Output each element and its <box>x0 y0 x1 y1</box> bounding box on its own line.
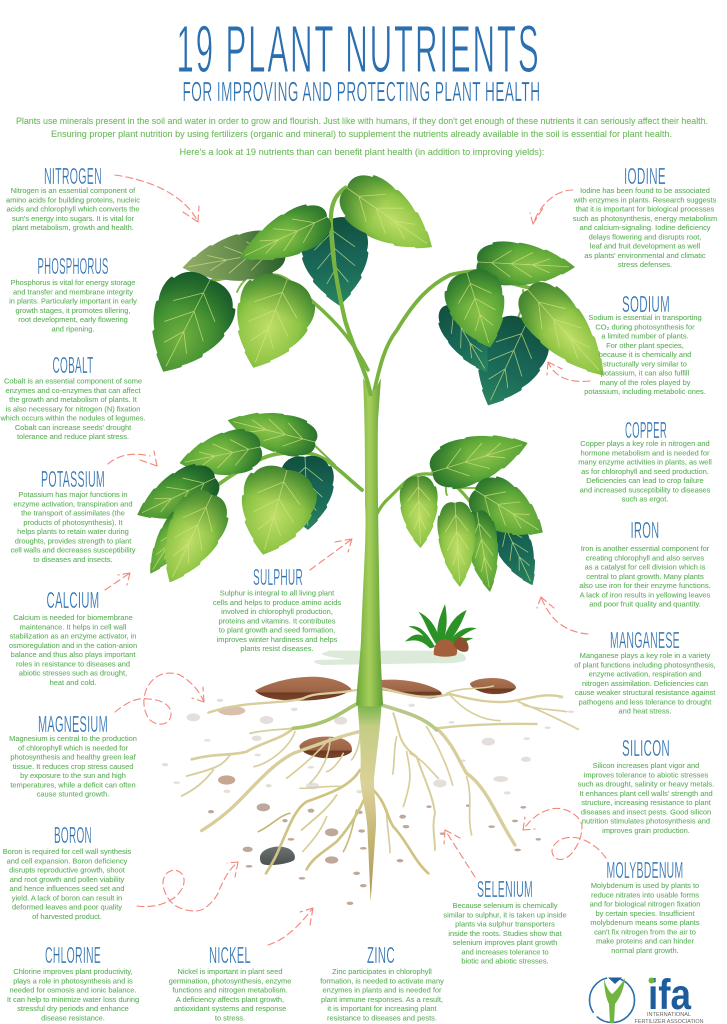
nitrogen <box>6 163 140 232</box>
boron: deformed leaves and poor quality <box>12 902 122 912</box>
chlorine: plays a role in photosynthesis and is <box>13 976 133 985</box>
boron: yield. A lack of boron can result in <box>12 893 122 902</box>
boron: and cell expansion. Boron deficiency <box>7 856 128 865</box>
molybdenum: and for biological nitrogen fixation <box>590 900 700 908</box>
selenium: inside the roots. Studies show that <box>448 929 563 938</box>
iodine: IODINE <box>624 163 666 189</box>
iodine: delays flowering and disrupts root, <box>589 232 701 241</box>
silicon: Silicon increases plant vigor and <box>593 761 699 770</box>
iron: as a catalyst for cell division which is <box>585 562 706 572</box>
calcium: Calcium is needed for biomembrane <box>13 613 133 622</box>
magnesium: by exposure to the sun and high <box>20 771 126 780</box>
calcium: osmoregulation and in the cation-anion <box>9 641 137 650</box>
phosphorus: in plants. Particularly important in early <box>9 296 137 306</box>
iodine: and calcium-signaling. Iodine deficiency <box>579 223 711 232</box>
nickel: antioxidant systems and response <box>174 1004 286 1013</box>
silicon: SILICON <box>622 735 670 761</box>
nickel: germination, photosynthesis, enzyme <box>169 976 291 985</box>
nitrogen: plant metabolism, growth and health. <box>12 223 134 232</box>
magnesium <box>9 711 137 798</box>
copper: many enzyme activities in plants, as well <box>578 458 712 466</box>
silicon: nutrition stimulates photosynthesis and <box>582 816 710 826</box>
phosphorus <box>9 253 137 333</box>
iodine: that it is important for biological processes <box>576 204 715 214</box>
potassium: to diseases and insects. <box>33 555 113 564</box>
sodium: Sodium is essential in transporting <box>588 313 702 322</box>
arrow: nickel <box>268 908 313 945</box>
intro text: Here's a look at 19 nutrients than can benefit plant health (in addition to improving yields): <box>180 147 544 157</box>
roots <box>182 686 578 873</box>
chlorine: Chlorine improves plant productivity, <box>13 967 133 976</box>
zinc: plant immune responses. As a result, <box>321 995 443 1004</box>
sulphur: involved in chlorophyll production, <box>221 607 333 616</box>
nickel: functions and nitrogen metabolism. <box>172 986 288 994</box>
calcium: abiotic stresses such as drought, <box>19 668 127 678</box>
silicon <box>578 735 714 835</box>
nitrogen: NITROGEN <box>44 163 102 189</box>
cobalt: Cobalt can increase seeds' drought <box>15 423 132 432</box>
manganese: and heat stress. <box>619 706 671 716</box>
silicon: diseases and insect pests. Good silicon <box>581 807 711 816</box>
molybdenum <box>590 857 700 955</box>
cobalt <box>0 352 146 441</box>
zinc: resistance to diseases and pests. <box>327 1013 437 1022</box>
boron: disrupts reproductive growth, shoot <box>9 866 126 874</box>
cobalt: COBALT <box>52 352 94 378</box>
leaves: upper plant <box>129 164 623 393</box>
stems <box>208 270 530 523</box>
potassium <box>11 466 136 564</box>
rocks <box>162 677 578 905</box>
iodine: stress defenses. <box>618 260 672 269</box>
arrow: iodine <box>530 190 573 224</box>
sodium: For other plant species, <box>606 341 684 350</box>
arrow: sodium <box>547 362 590 381</box>
magnesium: of chlorophyll which is needed for <box>18 743 129 752</box>
iodine: leaf and fruit development as well <box>590 242 701 250</box>
sodium: potassium, including metabolic ones. <box>584 387 706 396</box>
manganese <box>574 627 716 716</box>
intro text: Plants use minerals present in the soil and water in order to grow and flourish. Just like with humans, if they don't get enough of these nutrients it can seriously affect their health. <box>16 116 708 126</box>
iodine: as plants' environmental and climatic <box>584 251 706 260</box>
manganese: cause weaker structural resistance against <box>575 688 716 697</box>
iron: and poor fruit quality and quantity. <box>589 600 701 608</box>
chlorine <box>7 942 139 1022</box>
silicon: such as drought, salinity or heavy metals. <box>578 780 714 788</box>
magnesium: cause stunted growth. <box>37 790 109 798</box>
stone <box>260 847 295 865</box>
arrow: potassium <box>108 451 157 466</box>
logo ring <box>590 978 634 1022</box>
logo Y figure <box>604 978 625 1023</box>
boron: and root growth and pollen viability <box>10 875 125 884</box>
chlorine: needed for osmosis and ionic balance. <box>10 986 136 994</box>
intro text: Ensuring proper plant nutrition by using fertilizers (organic and mineral) to supplement the nutrients already available in the soil is essential for plant health. <box>51 129 672 139</box>
potassium: helps plants to retain water during <box>17 527 129 536</box>
boron: BORON <box>54 822 92 848</box>
boron: Boron is required for cell wall synthesis <box>3 847 132 856</box>
nickel: to stress. <box>215 1013 245 1022</box>
potassium: products of photosynthesis). It <box>23 518 124 527</box>
phosphorus: root development, early flowering <box>18 315 128 324</box>
zinc <box>320 942 444 1022</box>
boron: of harvested product. <box>32 912 102 921</box>
calcium: roles in resistance to diseases and <box>16 659 130 668</box>
selenium: biotic and abiotic stresses. <box>461 956 549 966</box>
leaves: lower plant <box>127 401 556 595</box>
arrow: calcium <box>105 573 130 590</box>
nickel <box>169 942 291 1022</box>
phosphorus: PHOSPHORUS <box>38 253 108 279</box>
sodium: structurally very similar to <box>603 359 687 368</box>
magnesium: MAGNESIUM <box>38 711 108 737</box>
zinc: Zinc participates in chlorophyll <box>332 967 432 976</box>
calcium: balance and thus also plays important <box>11 650 136 659</box>
sodium: CO₂ during photosynthesis for <box>595 322 695 331</box>
nickel: Nickel is important in plant seed <box>177 967 283 976</box>
sulphur <box>213 564 341 653</box>
calcium: heat and cold. <box>50 678 96 687</box>
phosphorus: and transfer and membrane integrity <box>13 287 133 296</box>
zinc: ZINC <box>367 942 395 968</box>
silicon: It enhances plant cell walls' strength and <box>579 789 713 798</box>
iodine <box>573 163 717 269</box>
iron: Iron is another essential component for <box>581 544 710 553</box>
chlorine: CHLORINE <box>45 942 101 968</box>
sulphur: proteins and vitamins. It contributes <box>218 616 336 625</box>
manganese: Manganese plays a key role in a variety <box>580 651 711 660</box>
nitrogen: acids and chlorophyll which converts the <box>6 204 140 214</box>
iron: also use iron for their enzyme functions. <box>579 581 711 590</box>
copper: such as ergot. <box>622 494 668 504</box>
magnesium: tissue. It reduces crop stress caused <box>13 762 133 771</box>
molybdenum: make proteins and can hinder <box>596 936 695 946</box>
cobalt: which occurs within the nodules of legumes. <box>0 414 146 422</box>
copper: and increased susceptibility to diseases <box>580 485 711 494</box>
calcium: stabilization as an enzyme activator, in <box>10 632 136 640</box>
main trunk <box>356 378 383 706</box>
zinc: enzymes in plants and is needed for <box>322 986 442 994</box>
manganese: of plant functions including photosynthesis, <box>574 660 716 669</box>
logo wordmark: ifa <box>648 971 692 1019</box>
iron: IRON <box>630 517 660 543</box>
IFA logo <box>590 971 704 1024</box>
silicon: improves grain production. <box>602 826 690 835</box>
calcium: maintenance. It helps in cell wall <box>20 622 127 631</box>
nitrogen: sun's energy into sugars. It is vital for <box>12 214 135 223</box>
cobalt: Cobalt is an essential component of some <box>4 376 142 386</box>
intro text <box>16 116 708 157</box>
boron: and hence influences seed set and <box>10 884 124 893</box>
sulphur: to plant growth and seed formation, <box>219 626 335 634</box>
selenium: and increases tolerance to <box>461 947 549 956</box>
magnesium: photosynthesis and healthy green leaf <box>10 752 137 762</box>
silicon: structure, increasing resistance to plant <box>581 798 712 807</box>
nickel: NICKEL <box>209 942 251 968</box>
iodine: Iodine has been found to be associated <box>580 186 710 195</box>
magnesium: Magnesium is central to the production <box>9 734 137 743</box>
molybdenum: normal plant growth. <box>611 946 679 955</box>
magnesium: temperatures, while a deficit can often <box>10 780 136 789</box>
manganese: pathogens and less tolerance to drought <box>579 697 712 706</box>
sodium: because it is chemically and <box>599 350 691 359</box>
calcium: CALCIUM <box>46 587 100 613</box>
pebbles <box>162 696 574 795</box>
nickel: A deficiency affects plant growth, <box>176 995 284 1004</box>
potassium: Potassium has major functions in <box>18 490 128 499</box>
sodium: many of the roles played by <box>600 378 691 387</box>
copper: COPPER <box>625 417 667 443</box>
copper: hormone metabolism and is needed for <box>580 448 710 457</box>
molybdenum: molybdenum means some plants <box>590 918 700 927</box>
calcium <box>9 587 137 687</box>
potassium: droughts, provides strength to plant <box>15 536 132 545</box>
zinc: it is important for increasing plant <box>327 1004 437 1013</box>
cobalt: enzymes and co-enzymes that can affect <box>5 386 141 395</box>
boron <box>3 822 132 921</box>
sulphur: cells and helps to produce amino acids <box>213 598 341 607</box>
arrow: molybdenum <box>523 808 606 859</box>
central stem over dark leaf <box>331 187 371 396</box>
cobalt: tolerance and reduce plant stress. <box>17 432 129 441</box>
sulphur: Sulphur is integral to all living plant <box>220 588 335 598</box>
arrow: magnesium <box>115 673 204 724</box>
selenium: plants via sulphur transporters <box>455 920 555 928</box>
leaves: back layer <box>178 215 557 593</box>
nitrogen: Nitrogen is an essential component of <box>11 186 136 195</box>
copper: Deficiencies can lead to crop failure <box>586 476 704 485</box>
iron: creating chlorophyll and also serves <box>586 553 704 562</box>
molybdenum: by certain species. Insufficient <box>595 909 695 918</box>
soil shadow and grass tuft <box>314 604 477 665</box>
zinc: formation, is needed to activate many <box>320 976 444 985</box>
sulphur: plants resist diseases. <box>240 644 314 653</box>
chlorine: It can help to minimize water loss during <box>7 995 139 1004</box>
iodine: such as photosynthesis, energy metabolism <box>573 214 717 223</box>
selenium <box>443 876 567 966</box>
potassium: POTASSIUM <box>41 466 105 492</box>
sodium: SODIUM <box>622 291 670 317</box>
taproot <box>357 700 382 902</box>
iodine: with enzymes in plants. Research suggests <box>573 195 717 204</box>
arrow: nitrogen <box>115 175 199 222</box>
selenium: SELENIUM <box>477 876 533 902</box>
molybdenum: can't fix nitrogen from the air to <box>594 927 696 936</box>
sulphur: SULPHUR <box>253 564 303 590</box>
manganese: nitrogen assimilation. Deficiencies can <box>582 679 708 688</box>
iron: A lack of iron results in yellowing leaves <box>580 590 711 599</box>
chlorine: stressful dry periods and enhance <box>17 1004 129 1013</box>
nitrogen: amino acids for building proteins, nucleic <box>6 195 140 204</box>
phosphorus: Phosphorus is vital for energy storage <box>11 278 135 287</box>
selenium: selenium improves plant growth <box>453 938 557 947</box>
sodium: potassium, it can also fulfill <box>601 368 690 378</box>
sulphur: improves winter hardiness and helps <box>217 635 338 644</box>
potassium: enzyme activation, transpiration and <box>13 499 133 508</box>
cobalt: the growth and metabolism of plants. It <box>9 395 138 404</box>
potassium: the transport of assimilates (the <box>21 508 125 518</box>
molybdenum: Molybdenum is used by plants to <box>591 881 699 890</box>
iron: central to plant growth. Many plants <box>586 572 704 581</box>
arrow: manganese <box>537 597 588 634</box>
arrow: sulphur <box>310 539 352 570</box>
selenium: Because selenium is chemically <box>452 901 558 910</box>
selenium: similar to sulphur, it is taken up inside <box>443 910 567 919</box>
silicon: improves tolerance to abiotic stresses <box>584 770 708 779</box>
copper: as for chlorophyll and seed production. <box>581 467 709 476</box>
phosphorus: and ripening. <box>51 324 95 333</box>
IFA logo: INTERNATIONAL <box>647 1012 691 1018</box>
copper: Copper plays a key role in nitrogen and <box>580 439 710 448</box>
iron <box>579 517 711 608</box>
manganese: enzyme activation, respiration and <box>589 670 701 678</box>
arrow: selenium <box>444 830 475 877</box>
cobalt: is also necessary for nitrogen (N) fixation <box>6 404 140 413</box>
sodium: a limited number of plants. <box>601 332 689 340</box>
chlorine: disease resistance. <box>41 1013 105 1022</box>
arrow: boron <box>137 862 238 911</box>
sodium <box>584 291 706 396</box>
phosphorus: growth stages, it promotes tillering, <box>16 306 130 315</box>
molybdenum: reduce nitrates into usable forms <box>591 890 699 899</box>
copper <box>578 417 712 504</box>
potassium: cell walls and decreases susceptibility <box>11 546 136 554</box>
